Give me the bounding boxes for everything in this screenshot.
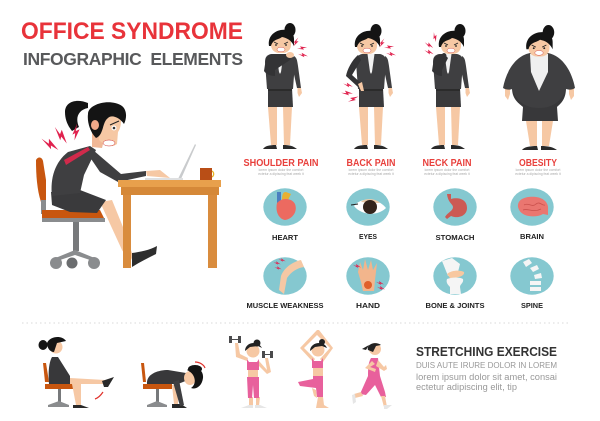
label: shoulder pain [244,158,318,176]
label: neck pain: ectetur a dipiscing feat week it [424,172,470,176]
main illustration: woman at desk with back pain [36,101,221,269]
laptop [145,144,196,180]
label: shoulder pain: lorem ipsum dolor the comfort [259,168,303,172]
coffee mug [200,168,214,180]
label: shoulder pain: ectetur a dipiscing feat week it [258,172,304,176]
label: back pain: BACK PAIN [346,158,396,169]
label: obesity: lorem ipsum dolor the comfort [516,168,560,172]
label: spine: SPINE [521,301,543,310]
label: obesity: OBESITY [519,158,557,169]
bent arm to shoulder [264,54,292,76]
figure: shoulder pain [263,23,308,149]
title: OFFICE SYNDROME [21,18,243,45]
label: neck pain: lorem ipsum dolor the comfort [425,168,469,172]
desk [118,180,221,268]
exercise: seated forward bend [141,362,205,408]
stretching exercise text: STRETCHING EXERCISE [416,345,557,359]
arm [85,150,146,182]
exercise: yoga tree pose [298,330,333,408]
icon: spine [510,257,554,295]
ponytail [65,101,88,131]
figure: back pain [341,24,396,149]
label: brain: BRAIN [520,232,544,241]
hair [88,102,126,138]
stretching exercise text: ectetur adipiscing elit, tip [416,382,517,392]
skirt [51,190,106,213]
label: obesity [515,158,561,176]
exercise: dumbbells [229,336,273,408]
label: muscle weakness: MUSCLE WEAKNESS [246,301,324,310]
label: back pain [346,158,396,176]
figure: neck pain [424,24,470,149]
stretching exercise text [416,345,557,392]
label: back pain: lorem ipsum dolor the comfort [349,168,393,172]
label: hand: HAND [356,301,381,310]
exercise: running [352,343,392,409]
exercise: seated leg raise [38,337,114,408]
arm on hip [346,55,362,87]
arm to neck [432,54,448,76]
label: heart: HEART [272,233,298,242]
subtitle: INFOGRAPHIC ELEMENTS [23,49,243,69]
icon: muscle weakness [263,257,307,295]
pain marks on shoulder [64,147,90,165]
label: obesity: ectetur a dipiscing feat week it [515,172,561,176]
icon: heart [263,188,307,226]
jacket [52,146,96,196]
icon: bone and joints [433,257,477,295]
label: back pain: ectetur a dipiscing feat week it [348,172,394,176]
icon: stomach [433,188,477,226]
stretching exercise text: DUIS AUTE IRURE DOLOR IN LOREM [416,360,557,370]
icon: eye [346,188,390,226]
stretching exercise text: lorem ipsum dolor sit amet, consai [416,372,557,382]
label: shoulder pain: SHOULDER PAIN [244,158,318,169]
icon: hand [346,257,390,295]
office chair [36,157,105,269]
shoe [132,246,157,267]
icon: brain [510,188,554,226]
label: eyes: EYES [359,232,377,241]
label: neck pain: NECK PAIN [422,158,472,169]
pain bolts [39,123,81,151]
label: neck pain [422,158,472,176]
label: stomach: STOMACH [436,233,474,242]
neck and face [92,132,104,148]
figure: obesity [503,25,575,150]
leg [100,200,133,262]
label: bone and joints: BONE & JOINTS [426,301,484,310]
